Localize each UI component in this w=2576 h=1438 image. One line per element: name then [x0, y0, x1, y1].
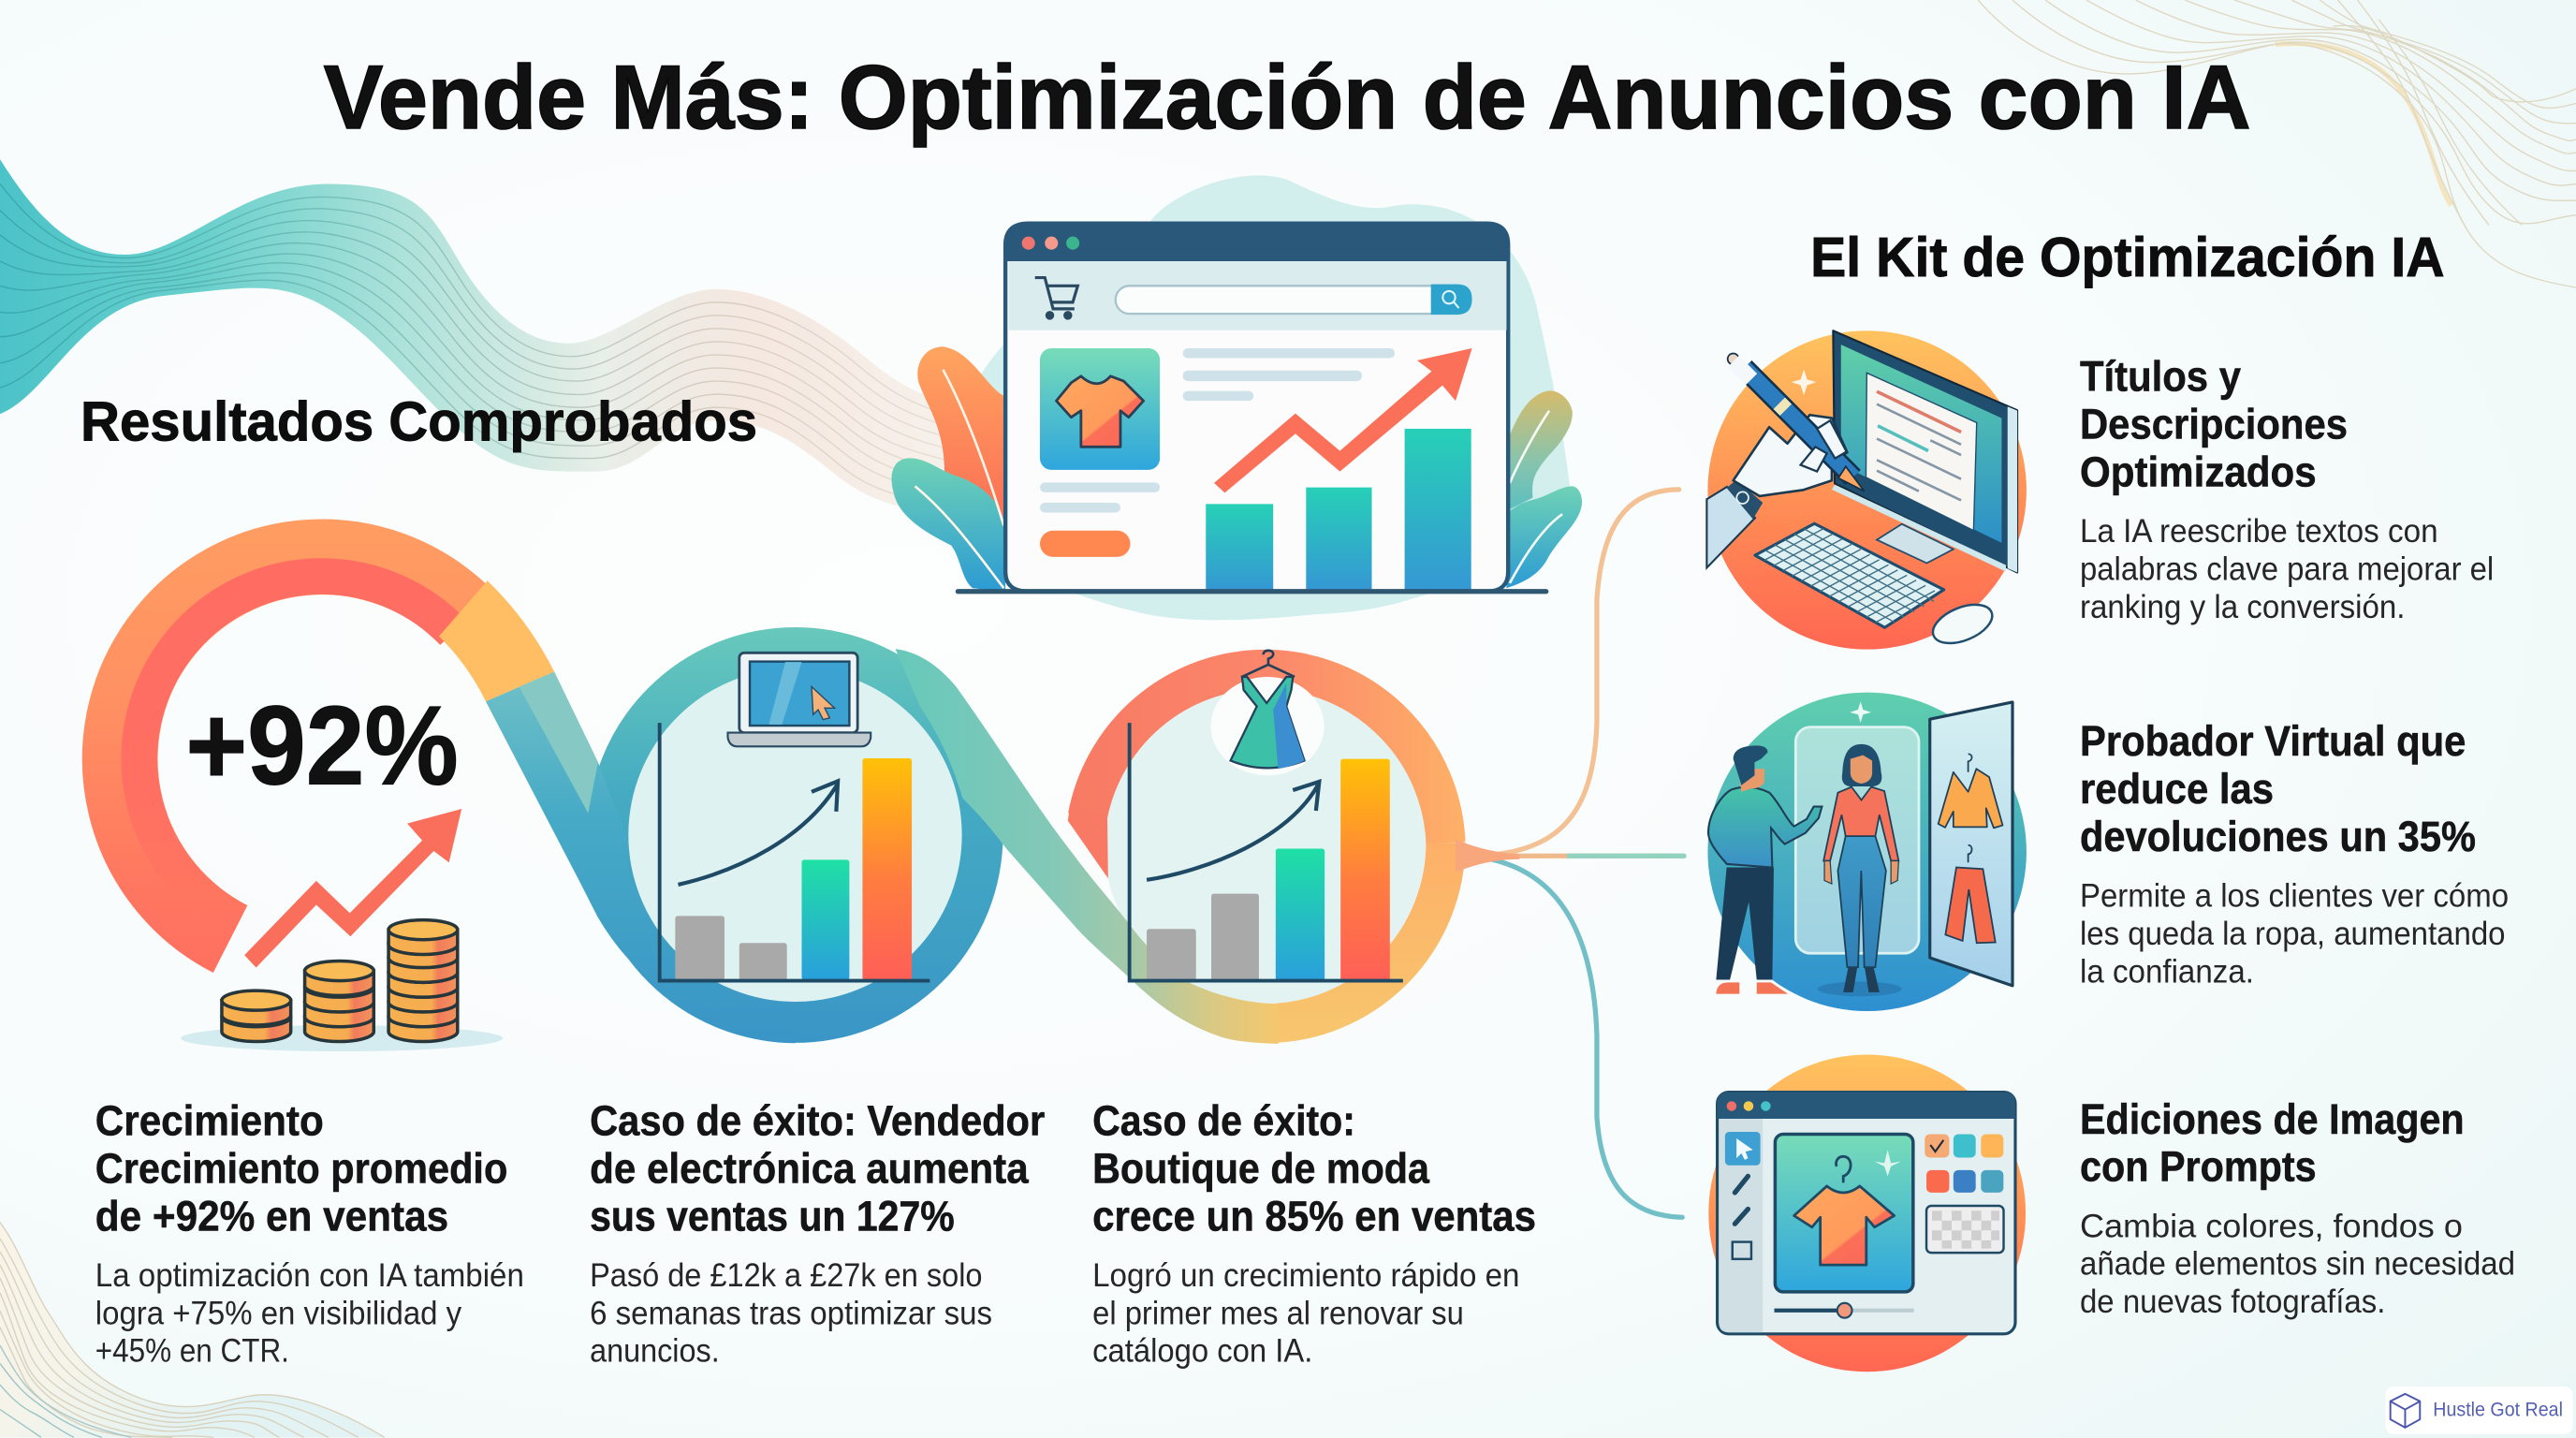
column: Vendedor de electrónica: Pasó de £12k a £27k en solo: [590, 1257, 983, 1294]
mirror: [1795, 727, 1919, 953]
column: Vendedor de electrónica: de electrónica aumenta: [590, 1144, 1029, 1192]
robot hand: [1734, 415, 1847, 496]
kit item: Títulos y Descripciones: Descripciones: [2080, 401, 2348, 448]
column: Boutique de moda: crece un 85% en ventas: [1092, 1192, 1536, 1240]
slider: [1775, 1303, 1914, 1318]
watermark: [2385, 1387, 2572, 1434]
kit item: Títulos y Descripciones: Títulos y: [2080, 353, 2242, 401]
yellow sweater: [1939, 754, 2002, 828]
monitor: [1833, 330, 2017, 573]
circle: [1708, 1055, 2026, 1372]
leaves right: [1506, 390, 1582, 588]
icon: growth arrow and coins: [181, 809, 503, 1051]
decorative flowing ribbon: [0, 159, 970, 522]
dots: [1727, 1101, 1771, 1111]
axes: [660, 723, 929, 981]
person: woman: [1823, 744, 1898, 992]
decorative wave: bottom left: [0, 1223, 385, 1437]
title: Vende Más: Optimización de Anuncios con IA: [324, 48, 2250, 148]
circle: [1707, 693, 2027, 1011]
column: Boutique de moda: Caso de éxito:: [1092, 1097, 1355, 1145]
column: Crecimiento: Crecimiento: [95, 1097, 324, 1145]
image canvas: [1775, 1134, 1913, 1292]
sparkle: [1875, 1150, 1901, 1176]
gauge inner band: [139, 577, 453, 902]
heading: El Kit de Optimización IA: El Kit de Optimización IA: [1810, 226, 2445, 288]
product text placeholders: [1040, 348, 1395, 512]
tools: [1725, 1132, 1761, 1259]
header: [1718, 1093, 2015, 1119]
red pants: [1945, 845, 1996, 943]
keyboard: [1755, 523, 1944, 627]
kit item: Probador Virtual: la confianza.: [2080, 953, 2254, 990]
kit item: Títulos y Descripciones: ranking y la conversión.: [2080, 589, 2405, 625]
column: Vendedor de electrónica: 6 semanas tras optimizar sus: [590, 1295, 992, 1331]
column: Crecimiento: Crecimiento promedio: [95, 1144, 507, 1192]
column: Vendedor de electrónica: Caso de éxito: Vendedor: [590, 1097, 1045, 1145]
column: Boutique de moda: catálogo con IA.: [1092, 1333, 1312, 1370]
column: Boutique de moda: el primer mes al renovar su: [1092, 1295, 1464, 1331]
color swatches: [1925, 1134, 2003, 1193]
kit item: Ediciones de Imagen: añade elementos sin necesidad: [2080, 1246, 2515, 1283]
heading: Resultados Comprobados: Resultados Comprobados: [80, 389, 757, 452]
column: Crecimiento: logra +75% en visibilidad y: [95, 1295, 462, 1331]
window frame: [1005, 224, 1508, 592]
kit item: Ediciones de Imagen: con Prompts: [2080, 1143, 2317, 1191]
sidebar: [1719, 1119, 1763, 1332]
column: Crecimiento: [95, 1097, 524, 1370]
band into loop 2: [486, 672, 795, 1043]
pen: [1728, 353, 1865, 492]
buy button: [1040, 531, 1131, 557]
illustration: online store browser: [891, 175, 1582, 620]
trend arrow: [679, 781, 838, 885]
connector lines: [1456, 490, 1684, 1217]
base line: [956, 589, 1548, 594]
kit item: Probador Virtual: reduce las: [2080, 765, 2274, 813]
kit item: Probador Virtual: les queda la ropa, aumentando: [2080, 916, 2506, 952]
arrow: [244, 809, 461, 968]
sparkle: [1850, 701, 1871, 723]
text lines: [1877, 391, 1961, 500]
loop 2: [607, 648, 983, 1022]
loop 3 disk: [1104, 682, 1426, 1004]
mouse: [1927, 597, 1998, 651]
background blob: [956, 175, 1571, 620]
loop 3 arc top: [1088, 669, 1445, 843]
kit item: Títulos y Descripciones: [2080, 353, 2494, 625]
search bar: [1116, 285, 1472, 315]
column: Boutique de moda: Boutique de moda: [1092, 1144, 1429, 1192]
icon: dress on hanger: [1211, 651, 1325, 775]
gauge arc: [120, 557, 461, 939]
kit item: Ediciones de Imagen: Cambia colores, fondos o: [2080, 1208, 2463, 1244]
bars: [1147, 759, 1390, 981]
monitor right edge: [2008, 406, 2017, 573]
growth arrow: [1214, 348, 1472, 492]
robot arm: [1706, 487, 1755, 567]
window header bar: [1005, 224, 1508, 261]
axes: [1130, 723, 1403, 981]
watermark text: Hustle Got Real: [2433, 1400, 2563, 1421]
hand fingers: [1801, 420, 1847, 472]
floor shadow: [1818, 981, 1902, 996]
column: Crecimiento: de +92% en ventas: [95, 1192, 448, 1240]
document: [1866, 373, 1977, 531]
column: Vendedor de electrónica: [590, 1097, 1045, 1370]
trend arrow: [1147, 782, 1319, 880]
monitor stand: [1877, 524, 1954, 564]
circle: [1707, 330, 2027, 650]
transparency swatch: [1926, 1206, 2004, 1253]
column: Crecimiento: +45% en CTR.: [95, 1333, 289, 1370]
chart: electronics seller: [660, 653, 929, 981]
kit item: Títulos y Descripciones: Optimizados: [2080, 448, 2317, 495]
kit item: Títulos y Descripciones: La IA reescribe textos con: [2080, 513, 2438, 550]
icon: laptop: [728, 653, 871, 746]
person: man: [1708, 745, 1822, 994]
column: Crecimiento: La optimización con IA también: [95, 1257, 524, 1294]
bars: [675, 758, 912, 981]
band between loops: [896, 649, 1278, 1044]
icon: virtual try-on: [1707, 693, 2027, 1011]
column: Vendedor de electrónica: anuncios.: [590, 1333, 720, 1370]
window dots: [1022, 237, 1079, 250]
kit item: Probador Virtual: devoluciones un 35%: [2080, 813, 2476, 860]
coin shadow: [181, 1025, 503, 1051]
t-shirt on hanger: [1794, 1156, 1895, 1265]
yellow segment: [439, 580, 554, 701]
leaves left: [891, 346, 1005, 592]
column: Boutique de moda: Logró un crecimiento rápido en: [1092, 1257, 1519, 1294]
kit item: Ediciones de Imagen: [2080, 1095, 2515, 1320]
sparkle: [1792, 370, 1816, 395]
kit item: Ediciones de Imagen: Ediciones de Imagen: [2080, 1095, 2465, 1143]
robot joint: [1727, 479, 1763, 519]
kit item: Probador Virtual: [2080, 717, 2509, 990]
monitor screen: [1841, 345, 2001, 543]
icon: t-shirt: [1057, 376, 1144, 447]
chart: fashion boutique: [1130, 651, 1403, 981]
monitor chin: [1832, 485, 2006, 572]
band highlight: [520, 672, 598, 814]
column: Vendedor de electrónica: sus ventas un 127%: [590, 1192, 955, 1240]
loop 3 arc bottom: [1265, 843, 1445, 1023]
kit item: Títulos y Descripciones: palabras clave para mejorar el: [2080, 550, 2494, 587]
window toolbar: [1009, 261, 1506, 330]
column: Boutique de moda: [1092, 1097, 1536, 1370]
bar chart: [1206, 429, 1471, 590]
kit item: Probador Virtual: Probador Virtual que: [2080, 717, 2466, 765]
kit item: Ediciones de Imagen: de nuevas fotografías.: [2080, 1284, 2385, 1320]
loop 3 tail: [1068, 808, 1108, 878]
product image: [1040, 348, 1160, 470]
decorative wave: top right: [1978, 0, 2576, 287]
stat: +92%: +92%: [185, 684, 459, 809]
icon: image editor: [1708, 1055, 2026, 1372]
window: [1718, 1093, 2015, 1334]
icon: robot hand writing on computer: [1706, 330, 2027, 651]
icon: shopping cart: [1035, 278, 1077, 318]
icon: cube: [2391, 1394, 2420, 1428]
coin stacks: [222, 920, 458, 1041]
clothing panel: [1930, 702, 2012, 986]
kit item: Probador Virtual: Permite a los clientes ver cómo: [2080, 878, 2509, 915]
infinity ribbon: [120, 557, 1445, 1044]
